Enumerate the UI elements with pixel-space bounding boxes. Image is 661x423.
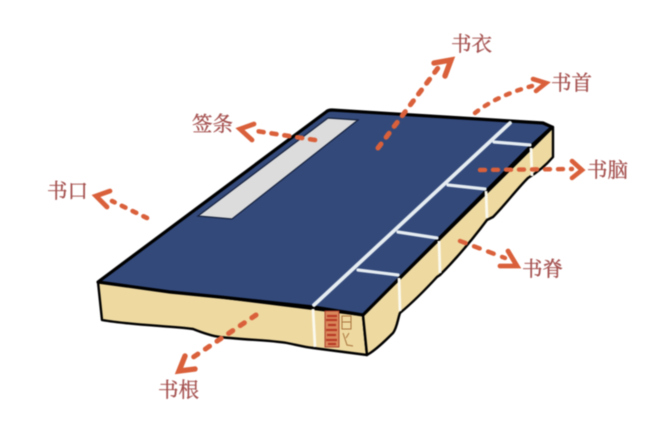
book illustration [98,110,553,355]
arrow: 书首 [475,79,546,113]
arrow: 签条 [240,124,315,140]
label: 书脊: 书脊 [522,258,563,281]
label: 签条: 签条 [192,113,233,136]
arrow: 书口 [96,191,147,218]
arrow: 书脑 [480,161,582,178]
label: 书脑: 书脑 [587,159,628,182]
arrow: 书脊 [460,241,517,266]
title label strip [198,118,358,219]
red seal stamp [325,311,353,347]
arrow: 书根 [179,315,256,371]
label: 书口: 书口 [47,180,88,203]
spine binding threads [314,123,530,305]
cover: top face [98,110,552,315]
label: 书根: 书根 [158,379,199,402]
page block: right side [363,127,553,355]
binding threads on page edges [313,148,532,347]
label: 书首: 书首 [551,72,592,95]
label: 书衣: 书衣 [451,33,492,56]
arrow: 书衣 [378,60,451,148]
page block: bottom side [98,282,367,355]
